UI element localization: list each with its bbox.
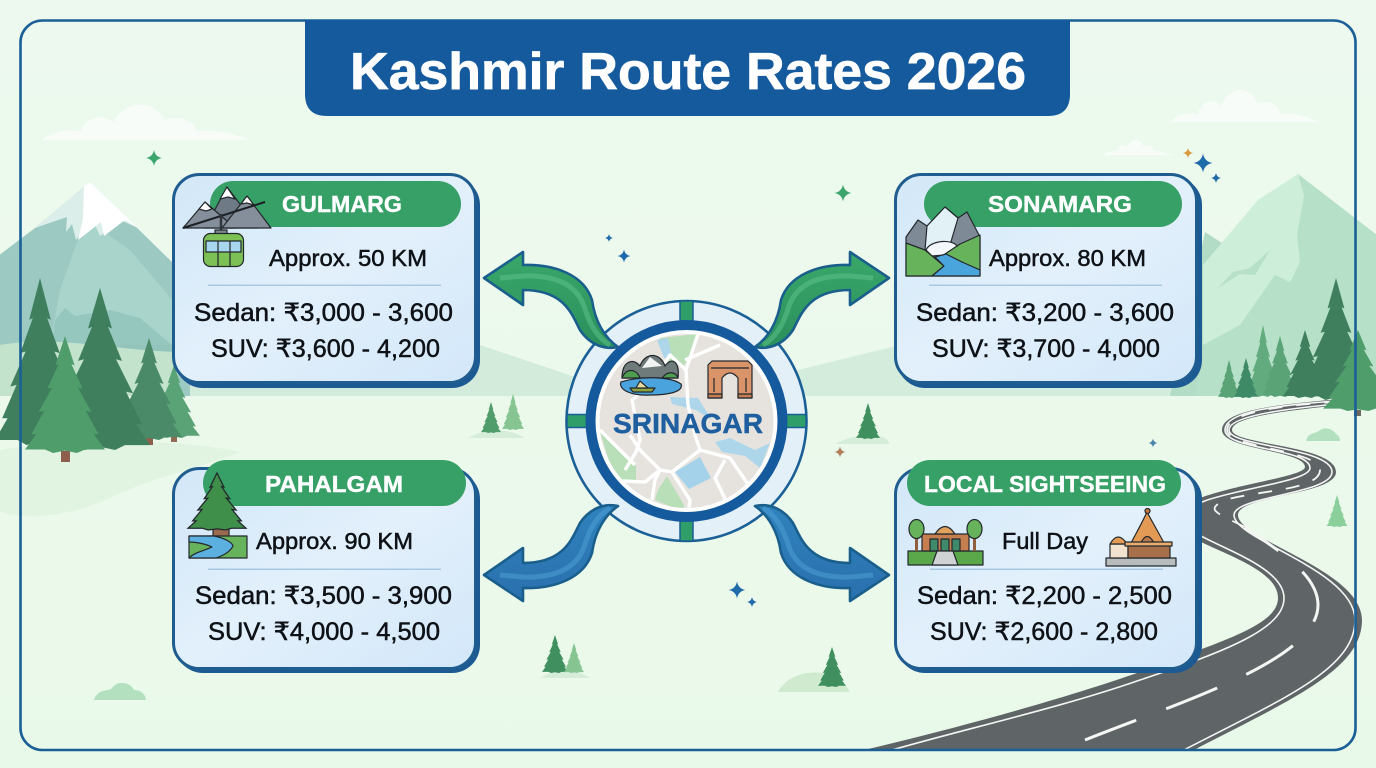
pill: Pahalgam heading: PAHALGAM (265, 471, 403, 497)
icon: mountains and cable car (183, 187, 271, 266)
card: Local Sightseeing (896, 460, 1202, 673)
distance: full day: Full Day (1002, 528, 1089, 554)
sedan rate: Sedan: ₹3,200 - 3,600 (916, 299, 1174, 327)
distance: Approx. 90 KM (256, 528, 413, 554)
pill: Gulmarg heading (210, 181, 461, 227)
SUV rate: SUV: ₹3,700 - 4,000 (932, 335, 1160, 363)
forest left (0, 278, 200, 462)
title banner (305, 20, 1070, 116)
pill: Sonamarg heading: SONAMARG (988, 191, 1132, 217)
icon: stone arch (708, 361, 752, 398)
distance: Approx. 50 KM (269, 245, 427, 271)
icon: pine tree and river (188, 473, 247, 558)
arrow to Local Sightseeing (755, 505, 889, 601)
pill: Pahalgam heading (203, 460, 466, 506)
card: Gulmarg (174, 174, 480, 388)
hub outer ring (566, 301, 806, 541)
icon: waterfall valley (906, 207, 980, 276)
background hills band (0, 330, 1376, 516)
card: Sonamarg (896, 174, 1202, 388)
sedan rate: Sedan: ₹3,500 - 3,900 (195, 582, 452, 610)
card: Pahalgam (174, 460, 480, 673)
right mountains (1170, 174, 1376, 396)
title text: Kashmir Route Rates 2026 (350, 43, 1026, 101)
Srinagar label: SRINAGAR (613, 408, 763, 439)
sedan rate: Sedan: ₹3,000 - 3,600 (194, 299, 453, 327)
pill: Gulmarg heading: GULMARG (282, 191, 402, 217)
arrow to Pahalgam (484, 505, 618, 601)
clouds (42, 90, 1320, 155)
road (855, 399, 1362, 752)
divider (208, 568, 441, 570)
icon: temple (1106, 508, 1176, 566)
divider (930, 568, 1163, 570)
arrow to Gulmarg (484, 252, 618, 348)
pill: Local Sightseeing heading: LOCAL SIGHTSEEING (924, 471, 1166, 497)
icon: Mughal garden (908, 520, 983, 565)
left mountain (0, 182, 190, 396)
SUV rate: SUV: ₹4,000 - 4,500 (208, 618, 440, 646)
forest right (1218, 278, 1376, 416)
pill: Sonamarg heading (924, 181, 1182, 227)
pill: Local Sightseeing heading (907, 460, 1181, 506)
divider (929, 284, 1162, 286)
arrow to Sonamarg (755, 252, 889, 348)
SUV rate: SUV: ₹2,600 - 2,800 (930, 618, 1158, 646)
distance: Approx. 80 KM (989, 245, 1146, 271)
icon: lake and boat (621, 356, 681, 395)
sedan rate: Sedan: ₹2,200 - 2,500 (917, 582, 1172, 610)
sparkles (146, 148, 1221, 607)
SUV rate: SUV: ₹3,600 - 4,200 (211, 335, 440, 363)
hub: Srinagar map (590, 325, 785, 520)
small trees and mounds (94, 394, 1348, 700)
divider (208, 284, 441, 286)
